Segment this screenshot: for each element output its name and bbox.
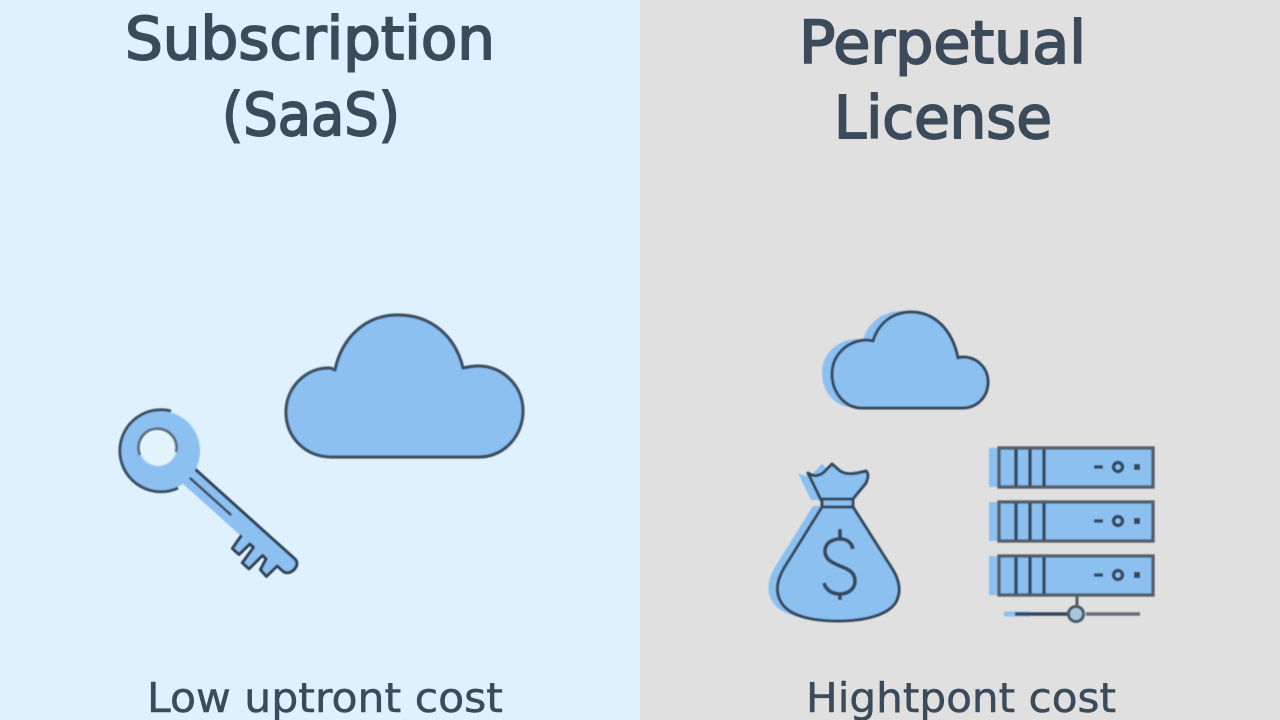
- heading: Perpetual License: [799, 8, 1086, 152]
- icon: money bag: [768, 464, 899, 621]
- icon: dollar sign: [824, 529, 855, 600]
- heading: Perpetual License: License: [834, 83, 1052, 152]
- icon: server stack: [989, 448, 1153, 622]
- panel: perpetual license: [640, 0, 1280, 720]
- heading: Subscription (SaaS): [125, 4, 495, 149]
- network connector: [1004, 596, 1140, 622]
- server unit 3: [989, 556, 1153, 595]
- icon: cloud: [822, 311, 988, 408]
- heading: Subscription (SaaS): (SaaS): [222, 80, 400, 149]
- server unit 2: [989, 502, 1153, 541]
- icon: cloud: [286, 315, 523, 457]
- heading: Subscription (SaaS): Subscription: [125, 4, 495, 73]
- server unit 1: [989, 448, 1153, 487]
- panel: subscription: [0, 0, 640, 720]
- heading: Perpetual License: Perpetual: [799, 8, 1086, 77]
- icon: key: [120, 410, 300, 592]
